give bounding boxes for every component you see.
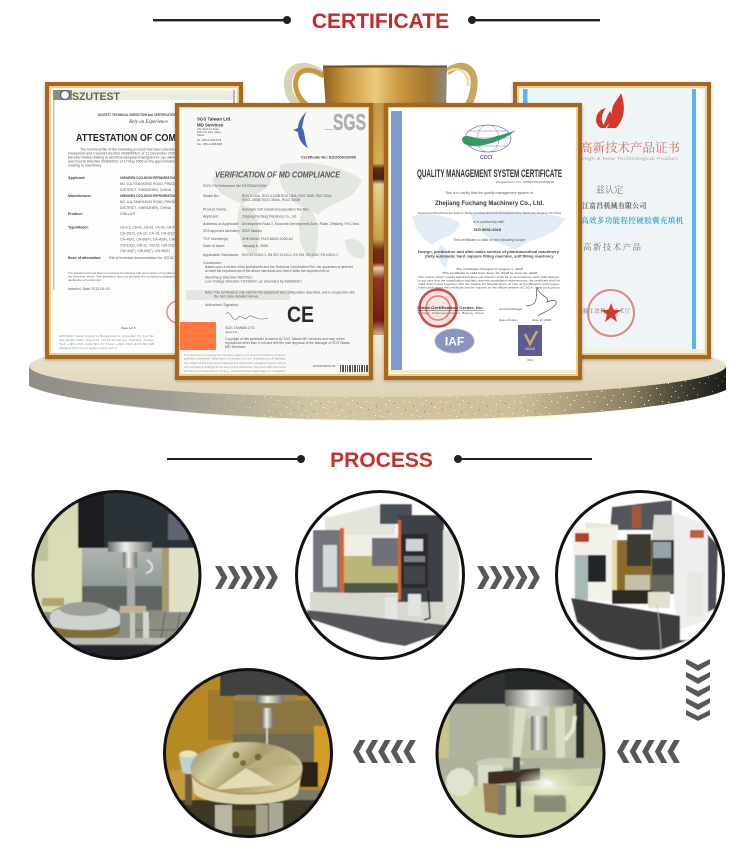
certificate text: DISTRICT, SHENZHEN, CHINA bbox=[120, 188, 172, 192]
certificate text: declaration of conformity. bbox=[68, 278, 101, 282]
certificate text: NO. 8-8, FANGKENG ROAD, PINGDI bbox=[120, 182, 176, 186]
certificate text: of Client's instructions, if any. Unauthorized alteration is unlawful. bbox=[184, 370, 286, 373]
certificate text: Applicable Standards: bbox=[203, 253, 239, 257]
certificate text: The attested technical file(s) is reviewed and attested with presumption of compliance bbox=[68, 271, 176, 275]
CCCI logo: CCCI bbox=[480, 155, 493, 161]
certificate text: Istanbul, Date 2013-09-15 bbox=[68, 287, 110, 291]
certificate text: January 6, 2006 bbox=[242, 244, 268, 248]
certificate text: valid when used together with the Notice for Maintenance of Use of Certification and Logos. bbox=[418, 282, 560, 286]
heading: process bbox=[167, 449, 592, 472]
certificate text: SZUTEST Teknik Kontrol ve Belgelendirme Hizmetleri Tic. Ltd. Sti. bbox=[59, 334, 154, 338]
SGS address block: Taiwan bbox=[197, 134, 205, 137]
Chinese certificate text: 江富昌机械有限公司 bbox=[582, 200, 647, 210]
orange label bbox=[180, 322, 216, 350]
certificate text: Product: bbox=[68, 212, 83, 216]
certificate text: Registration/Office/Production Address: Middle First Road, Economic Development Zone, Rui'an City, Zhejiang, P.R. China bbox=[418, 212, 562, 215]
IAF badge: IAF bbox=[445, 334, 464, 348]
signature block: 15 Floor, Chaoyang District, Beijing, China bbox=[417, 312, 485, 315]
signature block: Date of Issue: bbox=[499, 318, 518, 322]
CE mark: CE bbox=[287, 302, 314, 327]
certificate text: CW-10(2), CW-12, CW-15, CW-20(2) bbox=[120, 244, 176, 248]
certificate text: TCF Number(s): bbox=[203, 237, 229, 241]
certificate text: Base of attestation: bbox=[68, 256, 101, 260]
certificate text: the Directives above. This attestation does not derogate the compulsory obligations bbox=[68, 274, 176, 278]
SGS address block: Fax: +886-2-2298-8488 bbox=[197, 143, 223, 146]
certificate text: (fully automatic hard capsule filling machine, soft filling machine). bbox=[425, 254, 554, 258]
certificate title: QUALITY MANAGEMENT SYSTEM CERTIFICATE bbox=[417, 168, 562, 180]
arrows: step 2 to 3 bbox=[477, 566, 540, 589]
SGS address block: MD Services bbox=[197, 122, 224, 128]
icon: blue bird logo bbox=[293, 111, 308, 148]
certificate text: In the case that the organization regularly receives surveillance assessments, the certificate shall be bbox=[418, 278, 561, 282]
certificate text: SHENZHEN COOLBOON REFRIGERATION bbox=[120, 194, 176, 198]
certificate text: Based upon a review of the worksheets and the Technical Construction File, the apparatus is deemed bbox=[205, 265, 353, 269]
certificate text: Tel: +90 216 443 90 37 Fax: +90 216 443 90 38 bbox=[59, 342, 154, 346]
SGS address block: Tel: +886-2-2299-3279 bbox=[197, 139, 222, 142]
certificate text: Any holder of this document is advised that information contained hereon reflects bbox=[184, 362, 287, 365]
Chinese certificate text: 兹认定 bbox=[596, 183, 623, 196]
SGS logo bbox=[324, 109, 366, 135]
Chinese certificate text: 高新技术产品 bbox=[583, 241, 642, 253]
Chinese certificate text: 高新技术产品证书 bbox=[580, 138, 681, 156]
certificate text: The scope which needs administrative permission shall be in accordance with valid license. bbox=[418, 275, 560, 279]
certificate text: Applicant: bbox=[203, 214, 219, 218]
stamp bbox=[167, 301, 189, 323]
SGS address block bbox=[197, 116, 231, 146]
red stamp bbox=[588, 290, 634, 336]
photo: step 2 CNC machining centre bbox=[294, 490, 466, 662]
certificate text: to meet the requirements of the above standards and hence fulfils the requirements of: bbox=[205, 269, 330, 273]
certificate text: Page 1of 5 bbox=[121, 326, 136, 330]
Chinese certificate text bbox=[580, 138, 684, 315]
SGS address block: 125, Wu Kung Road, bbox=[197, 128, 219, 131]
SGS logo: SGS bbox=[333, 109, 366, 135]
certificate text: Manufacturer: bbox=[68, 194, 92, 198]
certificate text: RGG 280B,RGG 300A, RGG 300B bbox=[242, 198, 301, 202]
faint world map bbox=[186, 163, 365, 300]
SZUTEST logo band: SZUTEST bbox=[72, 91, 120, 103]
certificate text: reproduced other than in full and with the prior approval of the Manager of SGS Taiwan bbox=[225, 341, 350, 345]
certificate text: is in conformity with bbox=[473, 220, 504, 224]
certificate text: Information about the certificate can be inquired on the official website of CNCA / www.cnca.gov.cn bbox=[418, 286, 561, 290]
arrows: step 1 to 2 bbox=[215, 566, 278, 589]
certificate text: (seen) 121 bbox=[225, 330, 238, 334]
certificate text: CHILLER bbox=[120, 212, 136, 216]
certificate text: Design, production and after-sales service of pharmaceutical machinery bbox=[418, 249, 560, 254]
Chinese certificate text: High & New Technological Product bbox=[582, 156, 679, 161]
certificate text: This document is issued by the Company subject to its General Conditions of Service bbox=[184, 354, 287, 357]
arrows: step 5 to 4 bbox=[353, 740, 416, 763]
certificate text bbox=[184, 156, 359, 373]
certificate text: CW-40(F), CW-60(F), CW-80(F) bbox=[120, 249, 170, 253]
icon: red flame emblem bbox=[596, 93, 624, 128]
certificate text: Certificate No: EZ/2006/10006 bbox=[301, 156, 356, 160]
certificate text: This certificate is valid for the following scope: bbox=[453, 238, 526, 242]
certificate text: Copyright of this certificate is owned by SGS Taiwan MD Services and may not be bbox=[225, 337, 345, 341]
barcode bbox=[340, 365, 368, 372]
panel: high and new technology product certificate bbox=[513, 82, 711, 359]
certificate text bbox=[418, 180, 562, 290]
UKAS badge bbox=[518, 325, 542, 362]
certificate text: the test data detailed above. bbox=[214, 294, 259, 298]
certificate text: SGS approved laboratory: bbox=[203, 229, 240, 233]
certificate text: RGG 8-110A, RGG 8-110B,RGG 180A, RGG 180B, RGG 200A, bbox=[242, 194, 332, 198]
signature block: General Manager: bbox=[499, 307, 523, 311]
signature block: June 13, 2018 bbox=[532, 318, 551, 322]
certificate text: Parliament and Council Directive 2006/95/EC of 12 December 2006 bbox=[68, 152, 176, 156]
signature bbox=[226, 313, 268, 319]
certificate text: Zhejiang Fuchang Machinery Co., Ltd. bbox=[242, 214, 297, 218]
certificate text: relating to machinery. bbox=[68, 164, 102, 168]
certificate text: Date of Issue: bbox=[203, 244, 225, 248]
faint world map bbox=[412, 211, 565, 268]
certificate text: Automatic Soft Gelatin Encapsulation Machine bbox=[242, 208, 309, 212]
arrows: step 3 to 4 bbox=[686, 659, 710, 721]
Chinese certificate text: 高效多功能程控硬胶囊充填机 bbox=[581, 215, 684, 226]
certificate text: CA-0.5, CA-01, CA-02, CA-03, CA-05 bbox=[120, 226, 176, 230]
certificate text: Rely on Experience bbox=[128, 120, 169, 125]
certificate text: Low Voltage Directive 73/23/EEC as amended by 93/68/EEC bbox=[205, 280, 302, 284]
photo: step 1 drilling machine bbox=[30, 490, 205, 663]
SZUTEST logo band bbox=[53, 90, 235, 338]
certificate text: The certificate changed on August 1, 2018 bbox=[456, 267, 523, 271]
certificate text: Type/Model: bbox=[68, 226, 89, 230]
certificate text: VERIFICATION OF MD COMPLIANCE bbox=[215, 170, 341, 180]
heading: certificate: CERTIFICATE bbox=[312, 10, 449, 33]
certificate text: DISTRICT, SHENZHEN, CHINA bbox=[120, 206, 172, 210]
certificate text: Conclusion: bbox=[203, 261, 222, 265]
certificate text: SZUTEST TECHNICAL INSPECTION and CERTIFICATION bbox=[98, 113, 176, 117]
certificate text: This certificate is valid from June 13, 2018 to June 12, 2019 bbox=[442, 271, 537, 275]
certificate text: Member States relating to electrical equipment designed for use within bbox=[68, 156, 176, 160]
certificate text: Applicant: bbox=[68, 176, 86, 180]
photo: step 5 coolant milling bbox=[435, 668, 607, 840]
photo: step 3 vertical machining centre bbox=[554, 490, 726, 662]
Chinese certificate text: 浙江省科学技术厅 bbox=[582, 307, 631, 315]
panel: SGS verification of MD compliance certificate bbox=[175, 103, 373, 380]
CCCI logo bbox=[462, 125, 516, 161]
certificate text: MD Services. bbox=[225, 345, 246, 349]
certificate text: EZ/SJF00F/D 00 bbox=[313, 364, 336, 368]
certificate text: NO. 8-8, FANGKENG ROAD, PINGDI bbox=[120, 200, 176, 204]
certificate text: printed overleaf. Attention is drawn to the limitations of liability bbox=[184, 358, 287, 360]
certificate text: EN ISO 12100-1, EN ISO 12100-2, EN 294, EN 1050, EN 60204-1 bbox=[242, 253, 338, 257]
UKAS badge: UKAS bbox=[525, 347, 536, 351]
signature block bbox=[417, 288, 556, 322]
UKAS badge: 0044 bbox=[527, 359, 533, 362]
certificate text: ATTESTATION OF COM bbox=[76, 132, 176, 144]
certificate text bbox=[59, 113, 177, 350]
certificate text: SGS Taiwan bbox=[242, 229, 262, 233]
certificate text: CA-10(2), CA-12, CA-15, CA-20(2) bbox=[120, 232, 176, 236]
certificate text: This is to certify that the quality management system of bbox=[445, 191, 533, 195]
certificate text: and Council Directive 2006/42/EC of 17 May 2006 on the approximation bbox=[68, 160, 176, 164]
certificate text: Sile Road, Nato Yolu Cad. No:12 Umraniye, Istanbul, Turkey bbox=[59, 338, 155, 342]
IAF badge bbox=[435, 329, 474, 353]
certificate text: Development Road 3, Economic Development Zone, Ruian, Zhejiang, P.R.China bbox=[242, 222, 359, 226]
platform base bbox=[29, 335, 726, 422]
certificate text: Zhejiang Fuchang Machinery Co., Ltd. bbox=[435, 200, 544, 207]
SGS address block: Wufu Ind. Zone, Taipei, bbox=[197, 131, 222, 134]
icon: gold trophy bbox=[288, 65, 474, 365]
certificate text: File of technical documentation No: SZCB-1 bbox=[109, 256, 176, 260]
arrows: step 5 from 3 side bbox=[617, 740, 680, 763]
red company stamp bbox=[420, 290, 456, 326]
certificate text: SHENZHEN COOLBOON REFRIGERATION bbox=[120, 176, 176, 180]
panel: quality management system certificate bbox=[384, 103, 582, 380]
certificate text: Machinery Directive 98/37/EC bbox=[205, 276, 253, 280]
SGS address block: SGS Taiwan Ltd. bbox=[197, 116, 231, 122]
certificate text: Registration No. U006618Q0206548 bbox=[496, 180, 554, 184]
certificate text: ISO 9001:2015 bbox=[474, 227, 502, 232]
panel: SZUTEST attestation certificate bbox=[45, 82, 243, 359]
photo: step 4 brass disc milling bbox=[162, 666, 334, 842]
certificate text: info@szutest.com.tr www.szutest.com.tr bbox=[59, 346, 117, 350]
certificate text: Note: This certificate is only valid for the equipment and configuration described, and in conjunction with bbox=[205, 290, 355, 294]
heading: certificate bbox=[153, 10, 600, 33]
certificate text: Product Name: bbox=[203, 208, 227, 212]
certificate text: Authorized Signatory bbox=[205, 303, 239, 307]
certificate text: EZ/2006/10006 bbox=[242, 184, 267, 188]
certificate text: SGS TAIWAN LTD. bbox=[225, 326, 256, 330]
certificate text: CA-40(F), CA-60(F), CA-80(F), CW- bbox=[120, 238, 177, 242]
certificate text: SGS-TW Reference No: bbox=[203, 184, 242, 188]
certificate text: The technical file of the following product has been checked bbox=[80, 148, 176, 152]
signature block: China Certification Center, Inc. bbox=[417, 305, 484, 310]
certificate text: ZHEJIANG FUCHANG 2005-A2 bbox=[242, 237, 293, 241]
certificate text: Model No: bbox=[203, 194, 219, 198]
heading: process: PROCESS bbox=[330, 449, 433, 472]
certificate text: Address of Applicant: bbox=[203, 222, 239, 226]
certificate text: the Company's findings at the time of its intervention only and within the limits bbox=[184, 366, 287, 369]
